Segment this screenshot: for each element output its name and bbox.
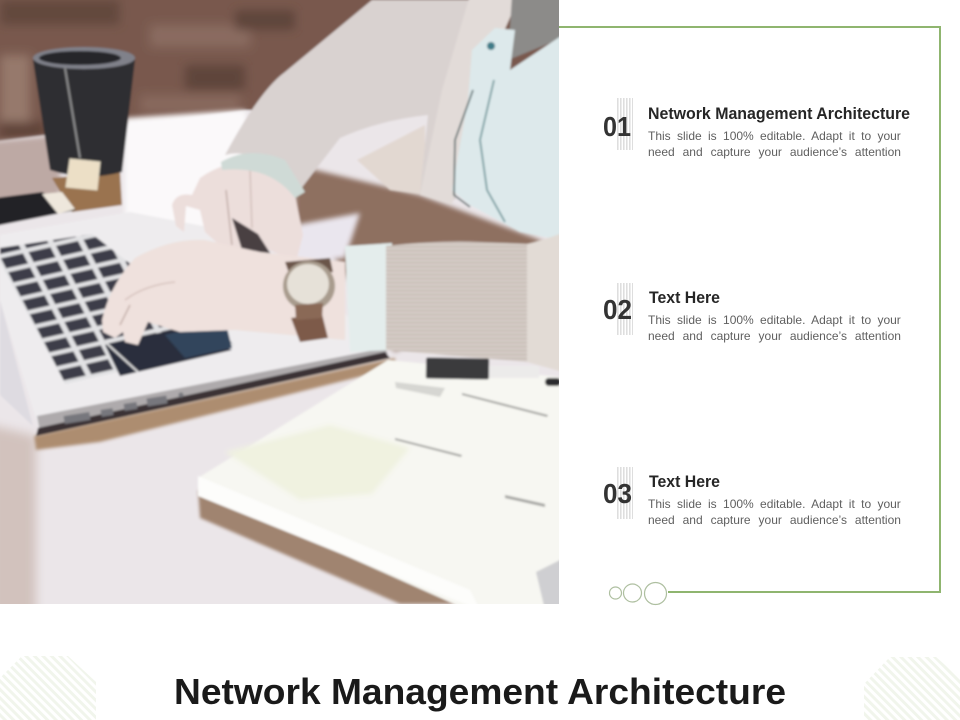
description 02: need and capture your audience’s attention	[648, 329, 901, 343]
heading 01: Network Management Architecture	[648, 105, 910, 123]
hair	[508, 0, 559, 59]
item 02	[603, 283, 901, 343]
shirt	[452, 28, 559, 238]
smartphone	[0, 192, 76, 226]
back hand	[172, 166, 303, 256]
hatched decoration right	[864, 657, 960, 720]
wrist watch	[283, 258, 335, 342]
number 02 with stripes	[603, 283, 633, 335]
knitted sleeve cuff	[345, 230, 570, 374]
keyboard	[0, 234, 235, 384]
desk surface	[0, 110, 580, 620]
title: Network Management Architecture	[174, 671, 786, 712]
tea cup with tag	[33, 47, 135, 212]
heading 02: Text Here	[649, 289, 720, 307]
item 03	[603, 467, 901, 527]
description 03: This slide is 100% editable. Adapt it to your	[648, 497, 901, 511]
decorative circles on frame	[610, 582, 666, 604]
number 03 with stripes	[603, 467, 633, 519]
hatched decoration left	[0, 656, 96, 720]
description 01: This slide is 100% editable. Adapt it to your	[648, 129, 901, 143]
white document stack	[198, 357, 570, 620]
cardigan sleeve and torso	[221, 0, 520, 205]
photo: person typing on laptop at desk	[0, 0, 580, 620]
description 01: need and capture your audience’s attention	[648, 145, 901, 159]
description 02: This slide is 100% editable. Adapt it to your	[648, 313, 901, 327]
ports	[64, 392, 183, 424]
brick wall background	[0, 0, 551, 142]
content frame	[559, 27, 940, 604]
number 03 with stripes: 03	[603, 478, 632, 509]
number 02 with stripes: 02	[603, 294, 632, 325]
heading 03: Text Here	[649, 473, 720, 491]
item 01	[603, 98, 910, 159]
front hand	[102, 240, 345, 345]
description 03: need and capture your audience’s attention	[648, 513, 901, 527]
laptop	[0, 212, 390, 436]
number 01 with stripes: 01	[603, 111, 631, 142]
number 01 with stripes	[603, 98, 633, 150]
